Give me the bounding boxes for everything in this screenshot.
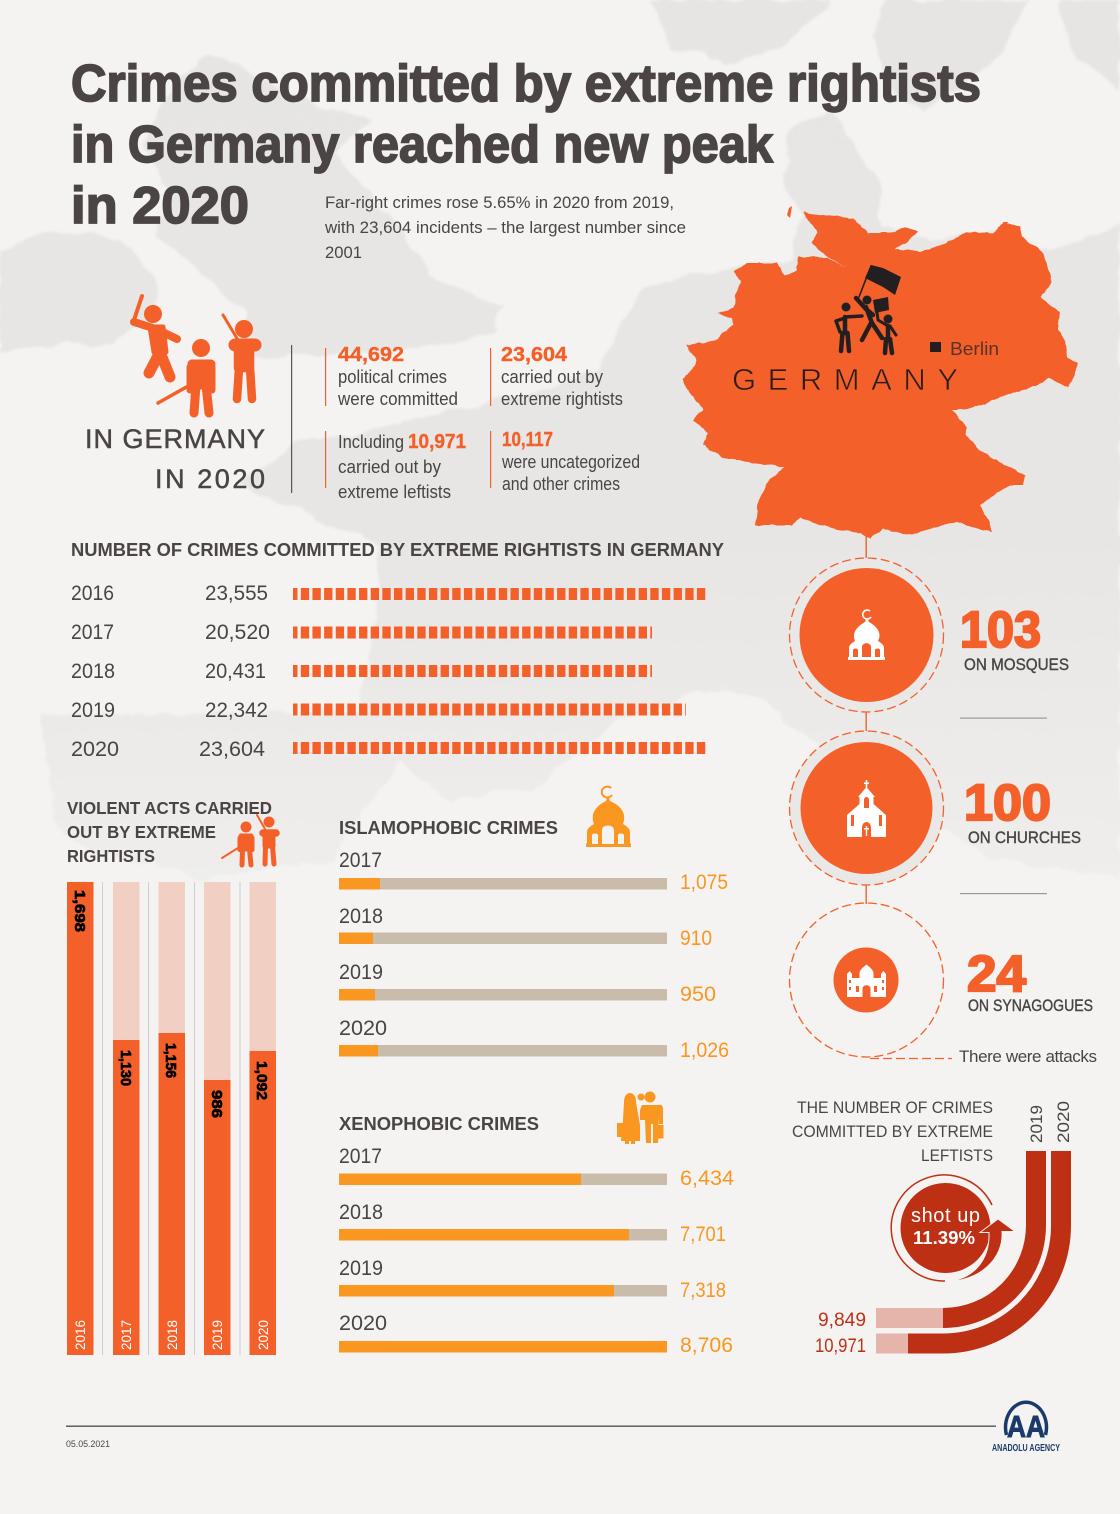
title: Crimes committed by extreme rightists <box>71 55 981 113</box>
title: in Germany reached new peak <box>71 116 773 174</box>
chart: xenophobic crimes: 2018 <box>339 1201 383 1224</box>
heading: in Germany in 2020: IN 2020 <box>155 464 265 494</box>
chart: leftist crimes curved bars <box>815 1101 1073 1357</box>
stat: 10,971 extreme leftists: extreme leftists <box>338 482 451 502</box>
stat: 10,117 uncategorized: 10,117 <box>502 429 553 451</box>
bar: 2018: 2018 <box>164 1320 180 1350</box>
callout: shot up 11.39%: 11.39% <box>913 1227 975 1248</box>
chart: crimes by extreme rightists per year: 2019 <box>71 699 115 722</box>
stat: 44,692 political crimes <box>337 344 458 409</box>
bar chart: violent acts per year <box>67 882 276 1355</box>
stat: 44,692 political crimes: political crimes <box>338 367 447 387</box>
connector from map <box>866 533 867 904</box>
chart: xenophobic crimes: 7,318 <box>680 1279 726 1302</box>
chart: leftist crimes curved bars: 2020 <box>1054 1101 1073 1143</box>
chart: xenophobic crimes: 2020 <box>339 1312 387 1335</box>
heading: in Germany in 2020 <box>85 424 265 494</box>
icon: church <box>847 780 886 837</box>
heading: crimes by extreme leftists <box>792 1098 993 1165</box>
chart: islamophobic crimes: 2020 <box>339 1017 387 1040</box>
panel: attacks on synagogues <box>790 903 1093 1057</box>
chart: crimes by extreme rightists per year: 20,520 <box>205 621 270 644</box>
bar: 2017: 1,130 <box>117 1050 134 1086</box>
logo: Anadolu Agency <box>992 1402 1060 1454</box>
title <box>71 55 981 235</box>
chart: crimes by extreme rightists per year: 20,431 <box>205 660 266 683</box>
title: in 2020 <box>71 177 249 235</box>
stat: 23,604 extreme rightists: 23,604 <box>501 344 568 366</box>
label: on synagogues: ON SYNAGOGUES <box>968 996 1093 1015</box>
bar: 2020 <box>250 882 276 1355</box>
stat: 23,604 extreme rightists <box>501 344 623 409</box>
value: 103: 103 <box>960 601 1041 658</box>
stat: 10,971 extreme leftists: 10,971 <box>408 431 466 453</box>
logo: Anadolu Agency: ANADOLU AGENCY <box>992 1443 1060 1454</box>
heading: number of crimes: NUMBER OF CRIMES COMMITTED BY EXTREME RIGHTISTS IN GERMANY <box>71 540 724 560</box>
chart: xenophobic crimes <box>339 1145 734 1357</box>
footer: 05.05.2021 <box>66 1439 110 1449</box>
logo: Anadolu Agency: AA <box>1007 1409 1045 1444</box>
icon: two attackers <box>222 815 276 865</box>
bar: 2020: 1,092 <box>253 1061 270 1100</box>
heading: violent acts: RIGHTISTS <box>67 846 155 866</box>
heading: crimes by extreme leftists: COMMITTED BY EXTREME <box>792 1122 993 1141</box>
map: Germany <box>683 206 1077 540</box>
chart: crimes by extreme rightists per year: 23,604 <box>199 738 265 761</box>
chart: islamophobic crimes: 2017 <box>339 849 382 872</box>
subtitle text: with 23,604 incidents – the largest number since <box>324 218 686 237</box>
panel: attacks on churches <box>790 731 1081 885</box>
heading: in Germany in 2020: IN GERMANY <box>85 424 265 454</box>
icon: orange mosque <box>586 787 631 847</box>
bar: 2019: 986 <box>208 1090 225 1118</box>
bar: 2019: 2019 <box>209 1320 225 1350</box>
marker: Berlin <box>930 339 999 359</box>
chart: islamophobic crimes <box>339 849 729 1062</box>
chart: crimes by extreme rightists per year: 23,555 <box>205 582 268 605</box>
stat: 44,692 political crimes: were committed <box>337 389 458 409</box>
chart: xenophobic crimes: 2019 <box>339 1257 383 1280</box>
chart: islamophobic crimes: 910 <box>680 927 712 950</box>
value: 24: 24 <box>967 945 1027 1002</box>
chart: crimes by extreme rightists per year: 22,342 <box>205 699 268 722</box>
label: on mosques: ON MOSQUES <box>964 655 1069 674</box>
stat: 10,971 extreme leftists: Including <box>338 432 404 452</box>
stats block <box>325 344 640 502</box>
stat: 10,117 uncategorized: were uncategorized <box>501 452 640 472</box>
icon: protesters with flag <box>836 265 901 353</box>
heading: xenophobic crimes: XENOPHOBIC CRIMES <box>339 1113 539 1134</box>
chart: islamophobic crimes: 1,026 <box>680 1039 729 1062</box>
chart: islamophobic crimes: 950 <box>680 983 716 1006</box>
bar: 2018 <box>158 882 185 1355</box>
icon: three attackers <box>133 296 255 413</box>
icon: migrant family <box>617 1092 664 1144</box>
chart: crimes by extreme rightists per year: 2017 <box>71 621 114 644</box>
panel: attacks on mosques <box>790 558 1069 712</box>
chart: leftist crimes curved bars: 2019 <box>1027 1105 1046 1143</box>
chart: xenophobic crimes: 8,706 <box>680 1334 733 1357</box>
chart: islamophobic crimes: 2019 <box>339 961 383 984</box>
heading: crimes by extreme leftists: LEFTISTS <box>921 1146 993 1165</box>
chart: xenophobic crimes: 6,434 <box>680 1167 734 1190</box>
label: on churches: ON CHURCHES <box>968 828 1081 847</box>
subtitle text: 2001 <box>325 243 362 262</box>
chart: xenophobic crimes: 2017 <box>339 1145 382 1168</box>
label: Germany: GERMANY <box>732 362 958 397</box>
chart: leftist crimes curved bars: 9,849 <box>818 1310 866 1331</box>
bar: 2016 <box>67 882 94 1355</box>
stat: 10,971 extreme leftists <box>338 431 466 502</box>
heading: violent acts <box>67 798 272 866</box>
heading: violent acts: OUT BY EXTREME <box>67 822 216 842</box>
chart: islamophobic crimes: 1,075 <box>680 871 728 894</box>
bar: 2016: 1,698 <box>71 890 88 932</box>
stat: 23,604 extreme rightists: carried out by <box>501 367 603 387</box>
bar: 2017: 2017 <box>118 1320 134 1350</box>
stat: 10,117 uncategorized: and other crimes <box>502 474 620 494</box>
bar: 2017 <box>113 882 140 1355</box>
chart: crimes by extreme rightists per year: 2016 <box>71 582 114 605</box>
bar: 2019 <box>204 882 230 1355</box>
subtitle text: Far-right crimes rose 5.65% in 2020 from 2019, <box>325 193 674 212</box>
stat: 10,971 extreme leftists: carried out by <box>338 457 441 477</box>
heading: violent acts: VIOLENT ACTS CARRIED <box>67 798 272 818</box>
heading: islamophobic crimes: ISLAMOPHOBIC CRIMES <box>339 817 558 838</box>
value: 100: 100 <box>964 774 1051 831</box>
note: there were attacks: There were attacks <box>959 1047 1097 1066</box>
heading: crimes by extreme leftists: THE NUMBER OF CRIMES <box>797 1098 993 1117</box>
bar: 2018: 1,156 <box>162 1043 179 1078</box>
callout: shot up 11.39% <box>891 1175 1015 1282</box>
callout: shot up 11.39%: shot up <box>911 1205 980 1227</box>
subtitle text <box>324 193 686 262</box>
chart: leftist crimes curved bars: 10,971 <box>815 1336 866 1357</box>
chart: crimes by extreme rightists per year <box>71 582 708 761</box>
bar: 2020: 2020 <box>255 1320 271 1350</box>
icon: mosque <box>848 610 885 660</box>
stat: 23,604 extreme rightists: extreme rightists <box>501 389 623 409</box>
marker: Berlin: Berlin <box>950 339 999 359</box>
chart: crimes by extreme rightists per year: 2020 <box>71 738 119 761</box>
bar: 2016: 2016 <box>72 1320 88 1350</box>
chart: crimes by extreme rightists per year: 2018 <box>71 660 115 683</box>
stat: 44,692 political crimes: 44,692 <box>338 344 404 366</box>
chart: xenophobic crimes: 7,701 <box>680 1223 726 1246</box>
chart: islamophobic crimes: 2018 <box>339 905 383 928</box>
icon: synagogue <box>847 964 886 997</box>
stat: 10,117 uncategorized <box>501 429 640 494</box>
